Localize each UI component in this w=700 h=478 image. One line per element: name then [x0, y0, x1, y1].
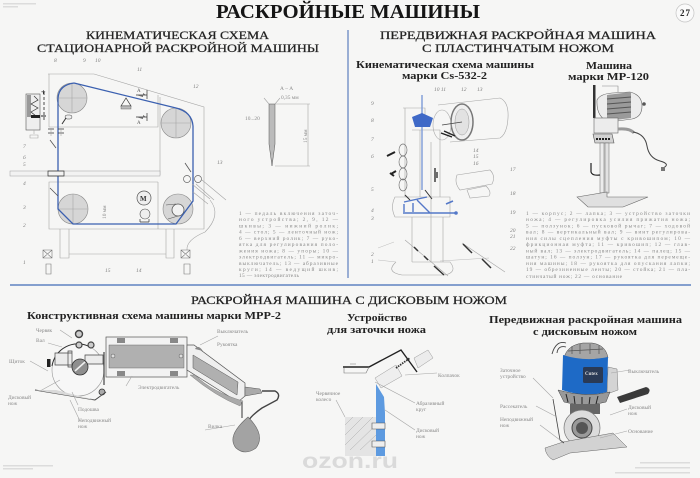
diagram numbers: 4 — [371, 207, 374, 214]
diagram numbers: 15 — [105, 268, 111, 274]
heading: disc knife machine: РАСКРОЙНАЯ МАШИНА С ДИСКОВЫМ НОЖОМ — [191, 293, 507, 307]
callout labels: нож — [78, 424, 87, 430]
diagram: blade section A-A: 15 мм — [303, 129, 309, 143]
diagram: sharpening device — [316, 350, 460, 456]
blue cutting band — [58, 83, 193, 224]
callout labels: Заточное — [500, 368, 521, 374]
callout labels: Вилка — [208, 424, 223, 430]
legend: mobile plate knife machine: 19 — обрезиненные ленты; 20 — стойка; 21 — пла- — [526, 266, 690, 273]
callout labels: Рассекатель — [500, 404, 528, 410]
micro-switch and motor — [121, 90, 147, 121]
callout labels: нож — [8, 401, 17, 407]
legend: stationary machine: 4 — стол; 5 — ленточный нож; — [239, 228, 338, 236]
legend: mobile plate knife machine: 1 — корпус; 2 — лапка; 3 — устройство заточки — [526, 210, 690, 217]
callout labels: Выключатель — [217, 329, 249, 335]
title: РАСКРОЙНЫЕ МАШИНЫ — [216, 0, 480, 23]
legend: mobile plate knife machine: шатун; 16 — ползун; 17 — рукоятка для перемеще- — [526, 254, 690, 260]
callout labels: Электродвигатель — [138, 385, 180, 391]
diagram numbers: 1 — [23, 260, 26, 266]
callout labels: Щиток — [9, 359, 25, 365]
diagram numbers: 12 — [461, 87, 467, 93]
legend: stationary machine: 15 — электродвигатель — [239, 273, 300, 279]
diagram numbers: 21 — [510, 234, 516, 240]
callout labels: Рукоятка — [217, 342, 238, 348]
diagram numbers: 7 — [23, 144, 26, 150]
illustration: mobile disc machine — [500, 342, 660, 460]
callout labels: Абразивный — [416, 400, 445, 407]
diagram numbers: 16 — [473, 161, 479, 167]
callout labels: Червяк — [36, 328, 53, 334]
callout labels: Подошва — [78, 407, 99, 413]
diagram numbers — [370, 87, 516, 265]
legend: stationary machine: 1 — педаль включения заточ- — [239, 211, 338, 217]
diagram numbers: 1 — [371, 259, 374, 265]
diagram numbers: 2 — [371, 252, 374, 258]
subheading: sharpening device: Устройство — [347, 313, 407, 324]
callout labels: устройство — [500, 373, 526, 380]
callout labels: Колпачок — [438, 373, 460, 379]
watermark: ozon.ru — [302, 450, 398, 473]
callout labels — [316, 373, 460, 440]
tension assembly — [26, 94, 40, 130]
diagram numbers: 14 — [136, 267, 142, 274]
subheading: sharpening device — [327, 313, 427, 336]
diagram: blade section A-A: 0,35 мм — [281, 95, 299, 101]
diagram numbers: 4 — [23, 180, 26, 187]
diagram: blade section A-A: 10 мм — [102, 205, 108, 219]
page number badge: 27 — [680, 8, 690, 18]
legend: stationary machine: электродвигатель; 11 — микро- — [239, 254, 338, 260]
legend: stationary machine: 6 — верхний ролик; 7 — руко- — [239, 235, 338, 242]
legend: mobile plate knife machine: вал; 8 — вертикальный вал; 9 — винт регулирова- — [526, 228, 690, 236]
diagram numbers: 13 — [217, 160, 223, 166]
diagram: blade section A-A — [102, 86, 310, 219]
callout labels: Неподвижный — [78, 417, 111, 424]
diagram: stationary cutting machine kinematic scheme: А — [137, 89, 141, 94]
heading: mobile plate knife machine: ПЕРЕДВИЖНАЯ РАСКРОЙНАЯ МАШИНА — [380, 28, 656, 42]
callout labels: Выключатель — [628, 369, 660, 375]
subheading: mobile disc machine: с дисковым ножом — [533, 327, 637, 338]
blue mechanism — [403, 95, 458, 215]
diagram numbers: 2 — [23, 223, 26, 229]
diagram numbers: 14 — [473, 147, 479, 154]
subheading: mobile disc machine — [489, 315, 683, 338]
diagram numbers: 10 — [95, 58, 101, 64]
diagram numbers: 5 — [371, 187, 374, 193]
diagram numbers: 7 — [371, 137, 374, 143]
legend: mobile plate knife machine: ножа; 4 — регулировка усилия прижатия ножа; — [526, 217, 690, 223]
legend: mobile plate knife machine: стинчатый нож; 22 — основание — [526, 273, 623, 280]
diagram: stationary cutting machine kinematic scheme: М — [140, 195, 147, 203]
diagram numbers: 9 — [371, 101, 374, 107]
diagram numbers: 6 — [371, 154, 374, 160]
callout labels: Червячное — [316, 391, 341, 397]
diagram numbers: 12 — [193, 84, 199, 90]
motor units at the bottom — [43, 250, 190, 274]
legend: mobile plate knife machine: ния силы сцепления муфты с кривошипом; 10 — — [526, 235, 691, 242]
diagram numbers: 10 11 — [434, 87, 446, 93]
heading: stationary machine: СТАЦИОНАРНОЙ РАСКРОЙНОЙ МАШИНЫ — [37, 41, 320, 55]
illustration: MP-120 machine — [577, 85, 666, 207]
heading: stationary machine: КИНЕМАТИЧЕСКАЯ СХЕМА — [86, 28, 269, 42]
diagram numbers: 18 — [510, 191, 516, 197]
callout labels: Неподвижный — [500, 416, 533, 423]
diagram: stationary cutting machine kinematic scheme: + — [41, 88, 46, 97]
diagram numbers: 22 — [510, 246, 516, 252]
diagram numbers: 8 — [54, 58, 57, 64]
heading: mobile plate knife machine: С ПЛАСТИНЧАТЫМ НОЖОМ — [422, 41, 614, 55]
dividers — [10, 30, 691, 285]
callout labels: Основание — [628, 429, 654, 435]
diagram numbers: 17 — [510, 167, 516, 173]
diagram numbers: 8 — [371, 118, 374, 124]
diagram: stationary cutting machine kinematic scheme: А — [137, 121, 141, 126]
legend: mobile plate knife machine: ния машины; 18 — рукоятка для опускания лапки; — [526, 261, 690, 267]
legend: mobile plate knife machine — [526, 210, 691, 280]
legend: stationary machine: жения ножа; 8 — упоры; 10 — — [238, 248, 339, 254]
callout labels: нож — [500, 423, 509, 429]
callout labels — [8, 328, 249, 430]
diagram numbers: 3 — [22, 205, 26, 211]
diagram numbers: 6 — [23, 155, 26, 161]
diagram: blade section A-A: А – А — [280, 86, 293, 92]
legend: stationary machine: выключатель; 13 — абразивные — [239, 260, 339, 267]
legend: mobile plate knife machine: 5 — ползунок; 6 — пусковой рычаг; 7 — ходовой — [526, 222, 690, 230]
subheading: MPP-2: Конструктивная схема машины марки МРР-2 — [27, 311, 281, 322]
diagram: stationary cutting machine kinematic scheme — [10, 58, 226, 274]
diagram numbers: 20 — [510, 228, 516, 234]
legend: mobile plate knife machine: ный вал; 13 — электродвигатель; 14 — палец; 15 — — [526, 248, 691, 254]
callout labels: Дисковый — [416, 427, 439, 434]
legend: stationary machine: ного устройства; 2, 9, 12 — — [239, 216, 339, 223]
subheading: Cs-532-2 — [356, 60, 534, 82]
callout labels: нож — [416, 434, 425, 440]
legend: stationary machine: шкивы; 3 — нижний ролик; — [239, 222, 338, 230]
diagram: MPP-2 design — [8, 328, 279, 452]
callout labels: Дисковый — [8, 394, 31, 401]
diagram: blade section A-A: 10...20 — [245, 116, 260, 122]
heading: stationary machine — [37, 28, 320, 55]
legend: stationary machine: круги; 14 — ведущий шкив; — [239, 266, 338, 273]
diagram numbers: 13 — [477, 87, 483, 93]
legend: mobile plate knife machine: фрикционная муфта; 11 — кривошип; 12 — глав- — [526, 241, 690, 248]
subheading: MP-120: Машина — [586, 61, 633, 72]
callout labels: Вал — [36, 338, 45, 344]
diagram numbers: 15 — [473, 154, 479, 160]
diagram numbers: 3 — [370, 216, 374, 222]
callout labels: Дисковый — [628, 404, 651, 411]
subheading: Cs-532-2: марки Cs-532-2 — [402, 71, 487, 82]
callout labels — [500, 368, 660, 435]
subheading: Cs-532-2: Кинематическая схема машины — [356, 60, 534, 71]
subheading: MP-120: марки МР-120 — [568, 72, 649, 83]
callout labels: нож — [628, 411, 637, 417]
diagram numbers: 11 — [137, 67, 142, 73]
diagram numbers: 9 — [83, 58, 86, 64]
legend: stationary machine: ятка для регулирования поло- — [239, 242, 338, 248]
legend: stationary machine — [238, 211, 339, 279]
subheading: MP-120 — [568, 61, 649, 83]
diagram numbers — [22, 58, 223, 274]
diagram numbers: 19 — [510, 210, 516, 216]
illustration: mobile disc machine: Cutex — [585, 372, 598, 377]
subheading: mobile disc machine: Передвижная раскройная машина — [489, 315, 683, 326]
callout labels: круг — [416, 407, 427, 413]
heading: mobile plate knife machine — [380, 28, 656, 55]
subheading: sharpening device: для заточки ножа — [327, 325, 427, 336]
diagram: Cs-532-2 kinematic scheme — [370, 87, 516, 276]
diagram numbers: 5 — [23, 162, 26, 168]
page number badge — [676, 4, 694, 22]
callout labels: колесо — [316, 397, 332, 403]
